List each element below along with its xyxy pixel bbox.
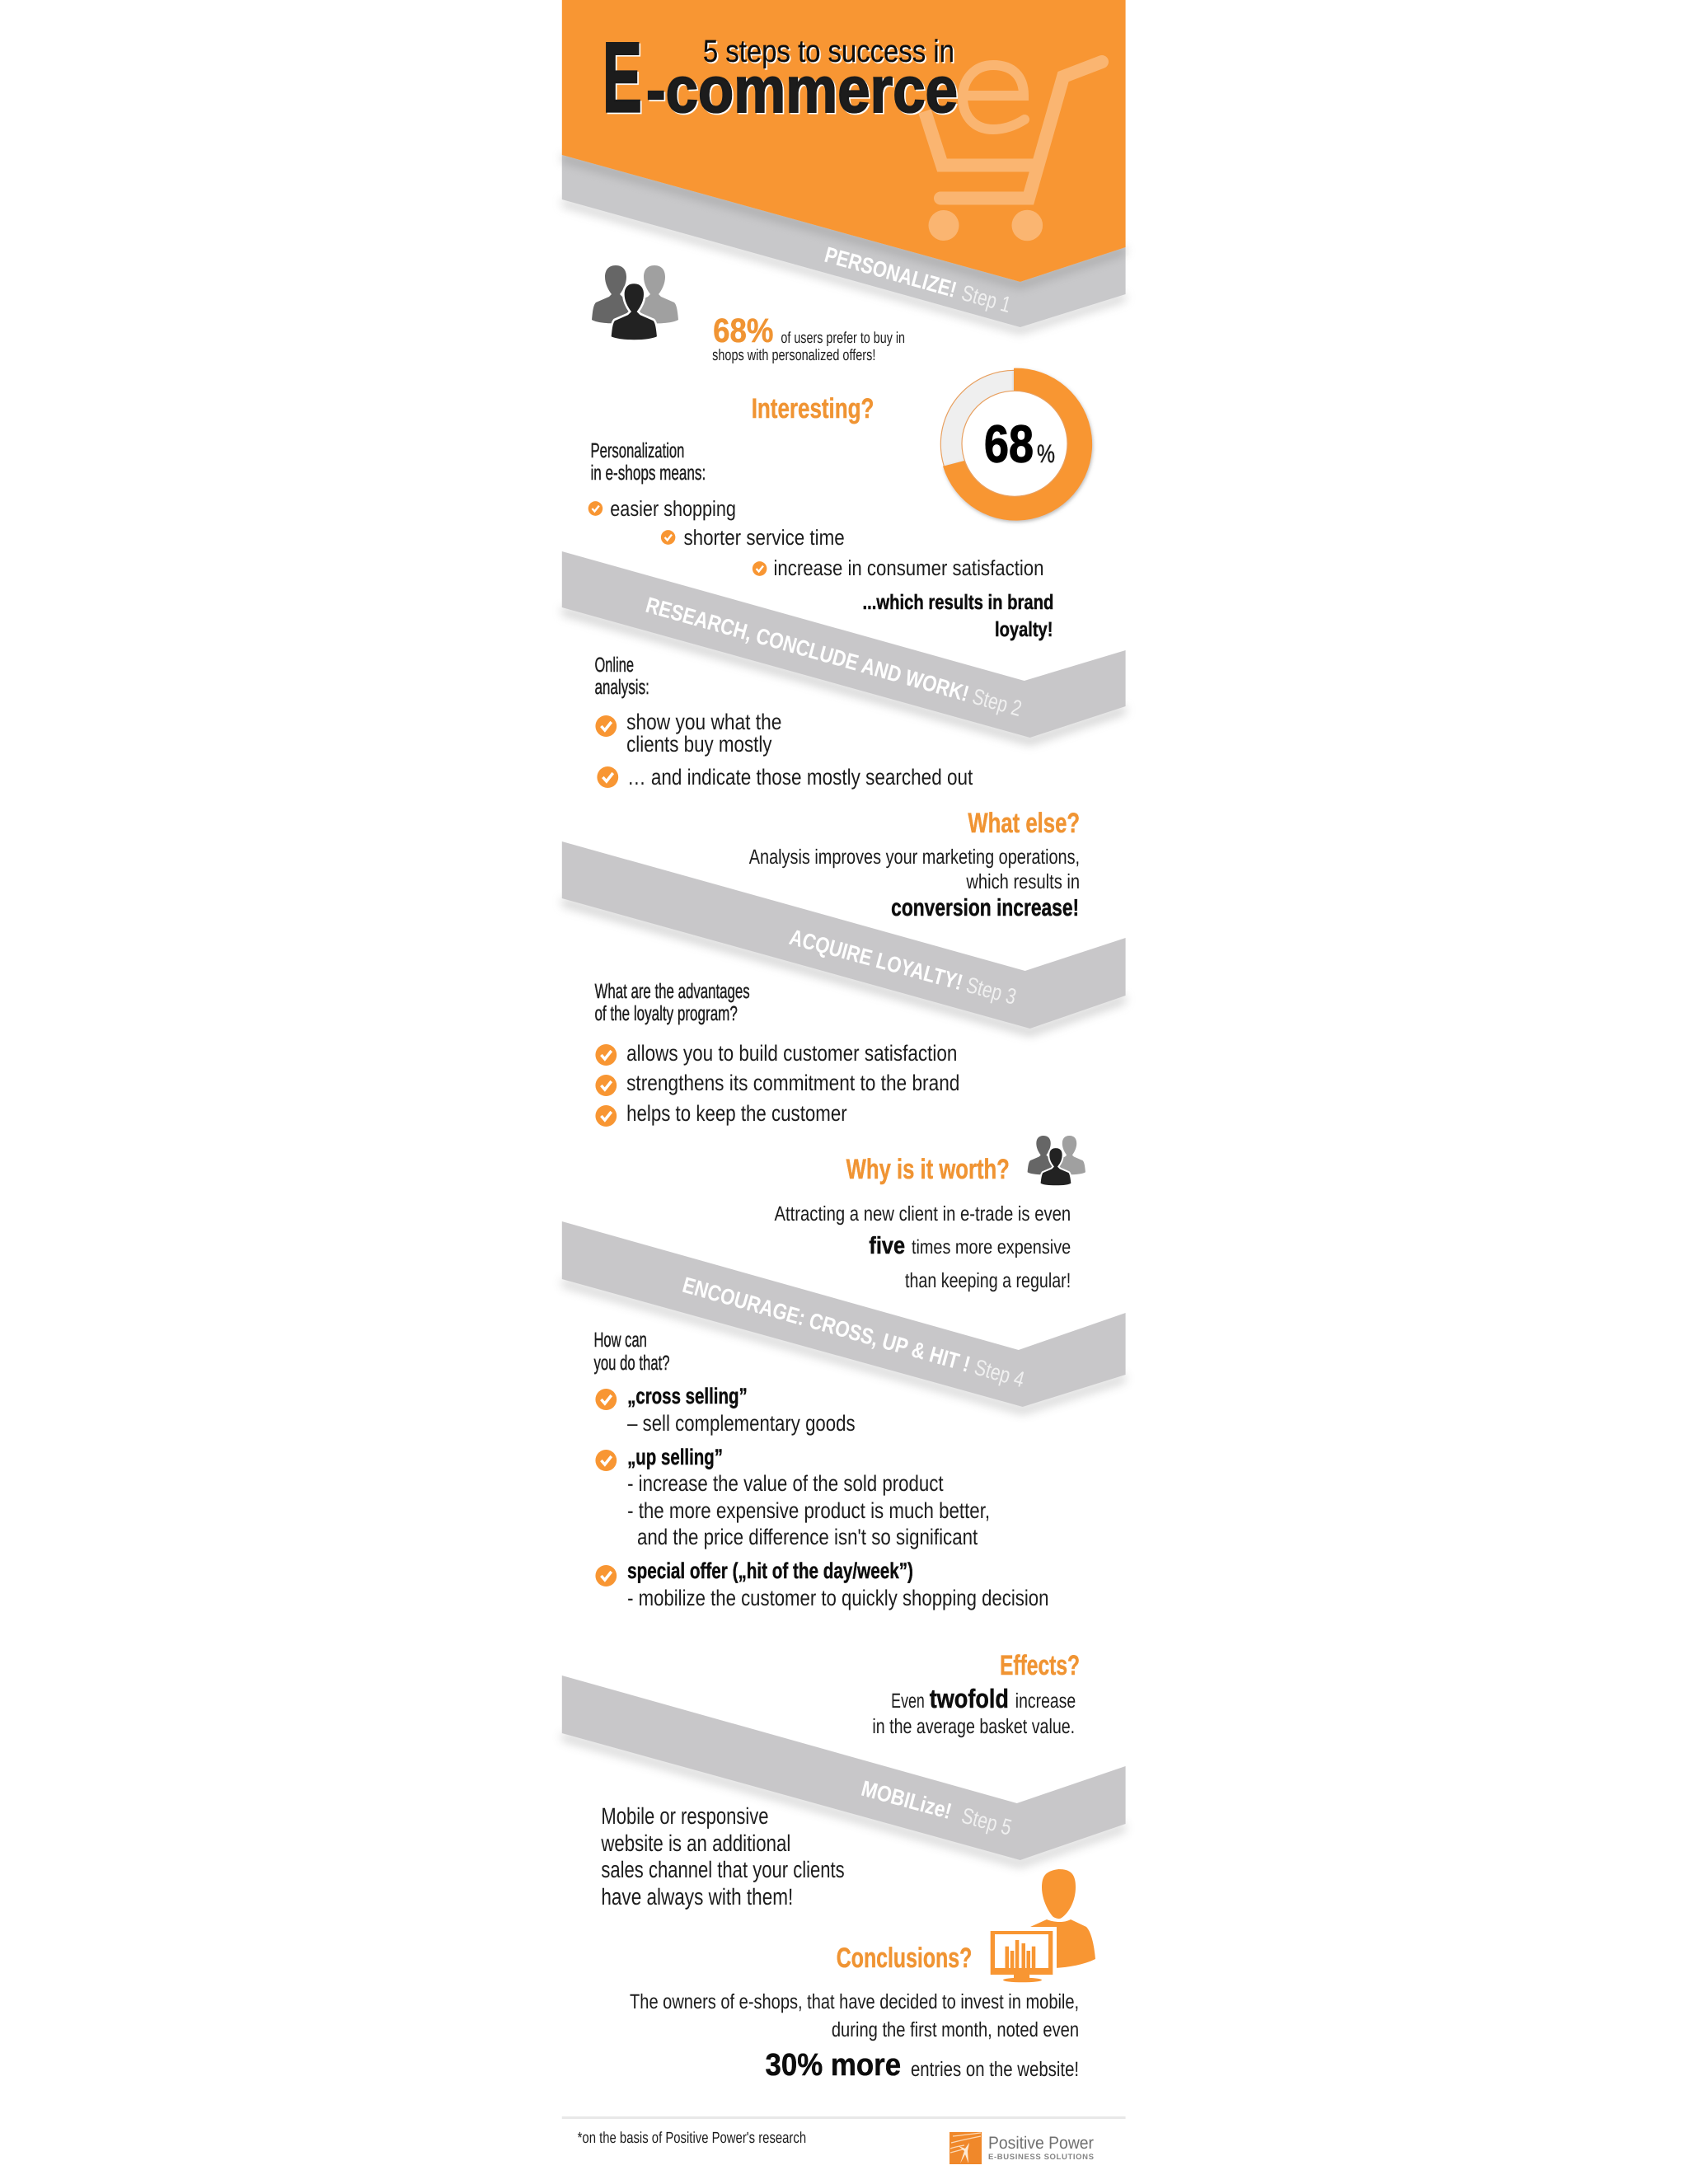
text: twofold increase: in the average basket value. [872,1715,1075,1738]
list item: up selling: and the price difference isn't so significant [637,1525,978,1549]
panel: band step 4 [562,1221,1126,1413]
list item: commitment to brand: strengthens its commitment to the brand [626,1071,959,1095]
text: twofold increase: twofold [930,1684,1009,1713]
text: analysis improves: which results in [966,870,1080,893]
label: step 3: ACQUIRE LOYALTY! [787,925,965,995]
text: loyalty question: What are the advantages [594,980,750,1003]
logo: Positive Power: Positive Power [988,2134,1094,2153]
chart: donut 68 percent: 68 [984,414,1034,473]
text: how can you do that: you do that? [593,1352,670,1375]
text: conclusions: entries on the website! [911,2058,1079,2081]
text: analysis improves: conversion increase! [891,895,1079,921]
label: step 2: RESEARCH, CONCLUDE AND WORK! [643,593,972,706]
chart: donut 68 percent [940,368,1092,521]
logo: Positive Power [950,2132,1094,2164]
text: conclusions: during the first month, noted even [832,2018,1079,2041]
stat: 68 percent of users [712,312,905,364]
list item: special offer: - mobilize the customer to quickly shopping decision [627,1586,1048,1610]
list item: easier shopping: easier shopping [610,496,736,521]
panel: band step 3 [562,841,1126,1035]
icon: shopping cart with e [925,62,1102,241]
text: conclusions: 30% more [766,2048,901,2083]
text: loyalty question: of the loyalty program? [594,1002,738,1025]
stat: 68 percent of users: of users prefer to buy in [781,330,905,347]
icon: small group of people [1028,1136,1085,1186]
text: five times more expensive: than keeping a regular! [905,1269,1071,1292]
title: E [603,21,642,134]
list item: cross selling: – sell complementary goods [627,1411,856,1436]
text: online analysis [594,654,649,699]
list item: shorter service time: shorter service time [683,525,845,550]
logo: Positive Power: E-BUSINESS SOLUTIONS [988,2153,1094,2162]
list item: show you what the clients buy: clients buy mostly [626,732,772,757]
title: 5 steps to success in [703,35,954,69]
text: brand loyalty conclusion [862,591,1053,641]
label: step 4: Step 4 [972,1355,1027,1392]
label: step 5: MOBILize! [859,1776,954,1824]
panel: band step 2 [562,551,1126,744]
text: mobile or responsive: sales channel that your clients [601,1857,845,1882]
text: five times more expensive: Attracting a new client in e-trade is even [774,1202,1071,1226]
panel: band step 5 [562,1675,1126,1867]
label: step 4: ENCOURAGE: CROSS, UP & HIT ! [680,1272,973,1377]
stat: 68 percent of users: shops with personalized offers! [712,347,875,364]
text: analysis improves [749,846,1080,921]
icon: group of people [592,265,678,341]
list item: special offer: special offer („hit of the day/week”) [627,1558,913,1583]
text: personalization intro: Personalization [590,439,684,462]
chart: donut 68 percent: % [1037,439,1055,468]
list item: customer satisfaction: allows you to build customer satisfaction [626,1041,957,1066]
footnote: *on the basis of Positive Power's research [578,2130,806,2147]
list item: show you what the clients buy [595,710,781,757]
label: step 5: Step 5 [959,1803,1015,1840]
text: brand loyalty conclusion: loyalty! [995,618,1053,641]
text: mobile or responsive: have always with them! [601,1884,793,1910]
label: step 5 [859,1776,1015,1840]
text: five times more expensive [774,1202,1071,1292]
heading: Conclusions?: Conclusions? [837,1943,972,1974]
list item: cross selling [595,1384,856,1436]
title [603,21,958,134]
text: personalization intro [590,439,706,485]
text: how can you do that [593,1329,670,1375]
stat: 68 percent of users: 68% [713,312,773,349]
title: -commerce [646,53,958,126]
text: five times more expensive: times more expensive [912,1236,1071,1258]
list item: mostly searched: … and indicate those mostly searched out [627,765,973,790]
label: step 1: PERSONALIZE! [822,242,959,302]
heading: What else?: What else? [968,808,1080,839]
text: twofold increase [872,1684,1076,1738]
text: mobile or responsive [601,1803,845,1910]
panel: orange header [562,0,1126,282]
label: step 2: Step 2 [970,684,1025,721]
text: brand loyalty conclusion: ...which results in brand [862,591,1053,614]
list item: keep the customer: helps to keep the customer [626,1101,847,1126]
list item: up selling: - increase the value of the sold product [627,1471,944,1496]
list item: special offer [595,1558,1048,1610]
heading: Interesting?: Interesting? [752,393,874,424]
text: analysis improves: Analysis improves your marketing operations, [749,846,1080,869]
label: step 1: Step 1 [959,280,1014,317]
heading: Why is it worth?: Why is it worth? [846,1154,1010,1185]
text: online analysis: Online [594,654,634,677]
text: twofold increase: Even [891,1690,925,1713]
text: personalization intro: in e-shops means: [590,462,706,485]
text: five times more expensive: five [869,1233,905,1259]
list item: up selling: „up selling” [627,1445,723,1469]
panel: header band step 1 [562,155,1126,333]
label: step 3: Step 3 [964,972,1019,1010]
text: how can you do that: How can [593,1329,647,1352]
text: online analysis: analysis: [594,676,649,699]
heading: Effects?: Effects? [1000,1650,1080,1681]
text: loyalty question [594,980,750,1025]
text: mobile or responsive: Mobile or responsive [601,1803,769,1829]
list item: up selling: - the more expensive product is much better, [627,1498,990,1523]
list item: cross selling: „cross selling” [627,1384,748,1408]
list item: show you what the clients buy: show you what the [626,710,781,734]
text: conclusions [630,1990,1079,2083]
text: twofold increase: increase [1015,1690,1076,1713]
icon: person with monitor [988,1869,1095,1982]
list item: up selling [595,1445,990,1549]
list item: increase in consumer satisfaction: increase in consumer satisfaction [773,555,1043,580]
text: conclusions: The owners of e-shops, that have decided to invest in mobile, [630,1990,1079,2013]
text: mobile or responsive: website is an additional [601,1830,790,1856]
